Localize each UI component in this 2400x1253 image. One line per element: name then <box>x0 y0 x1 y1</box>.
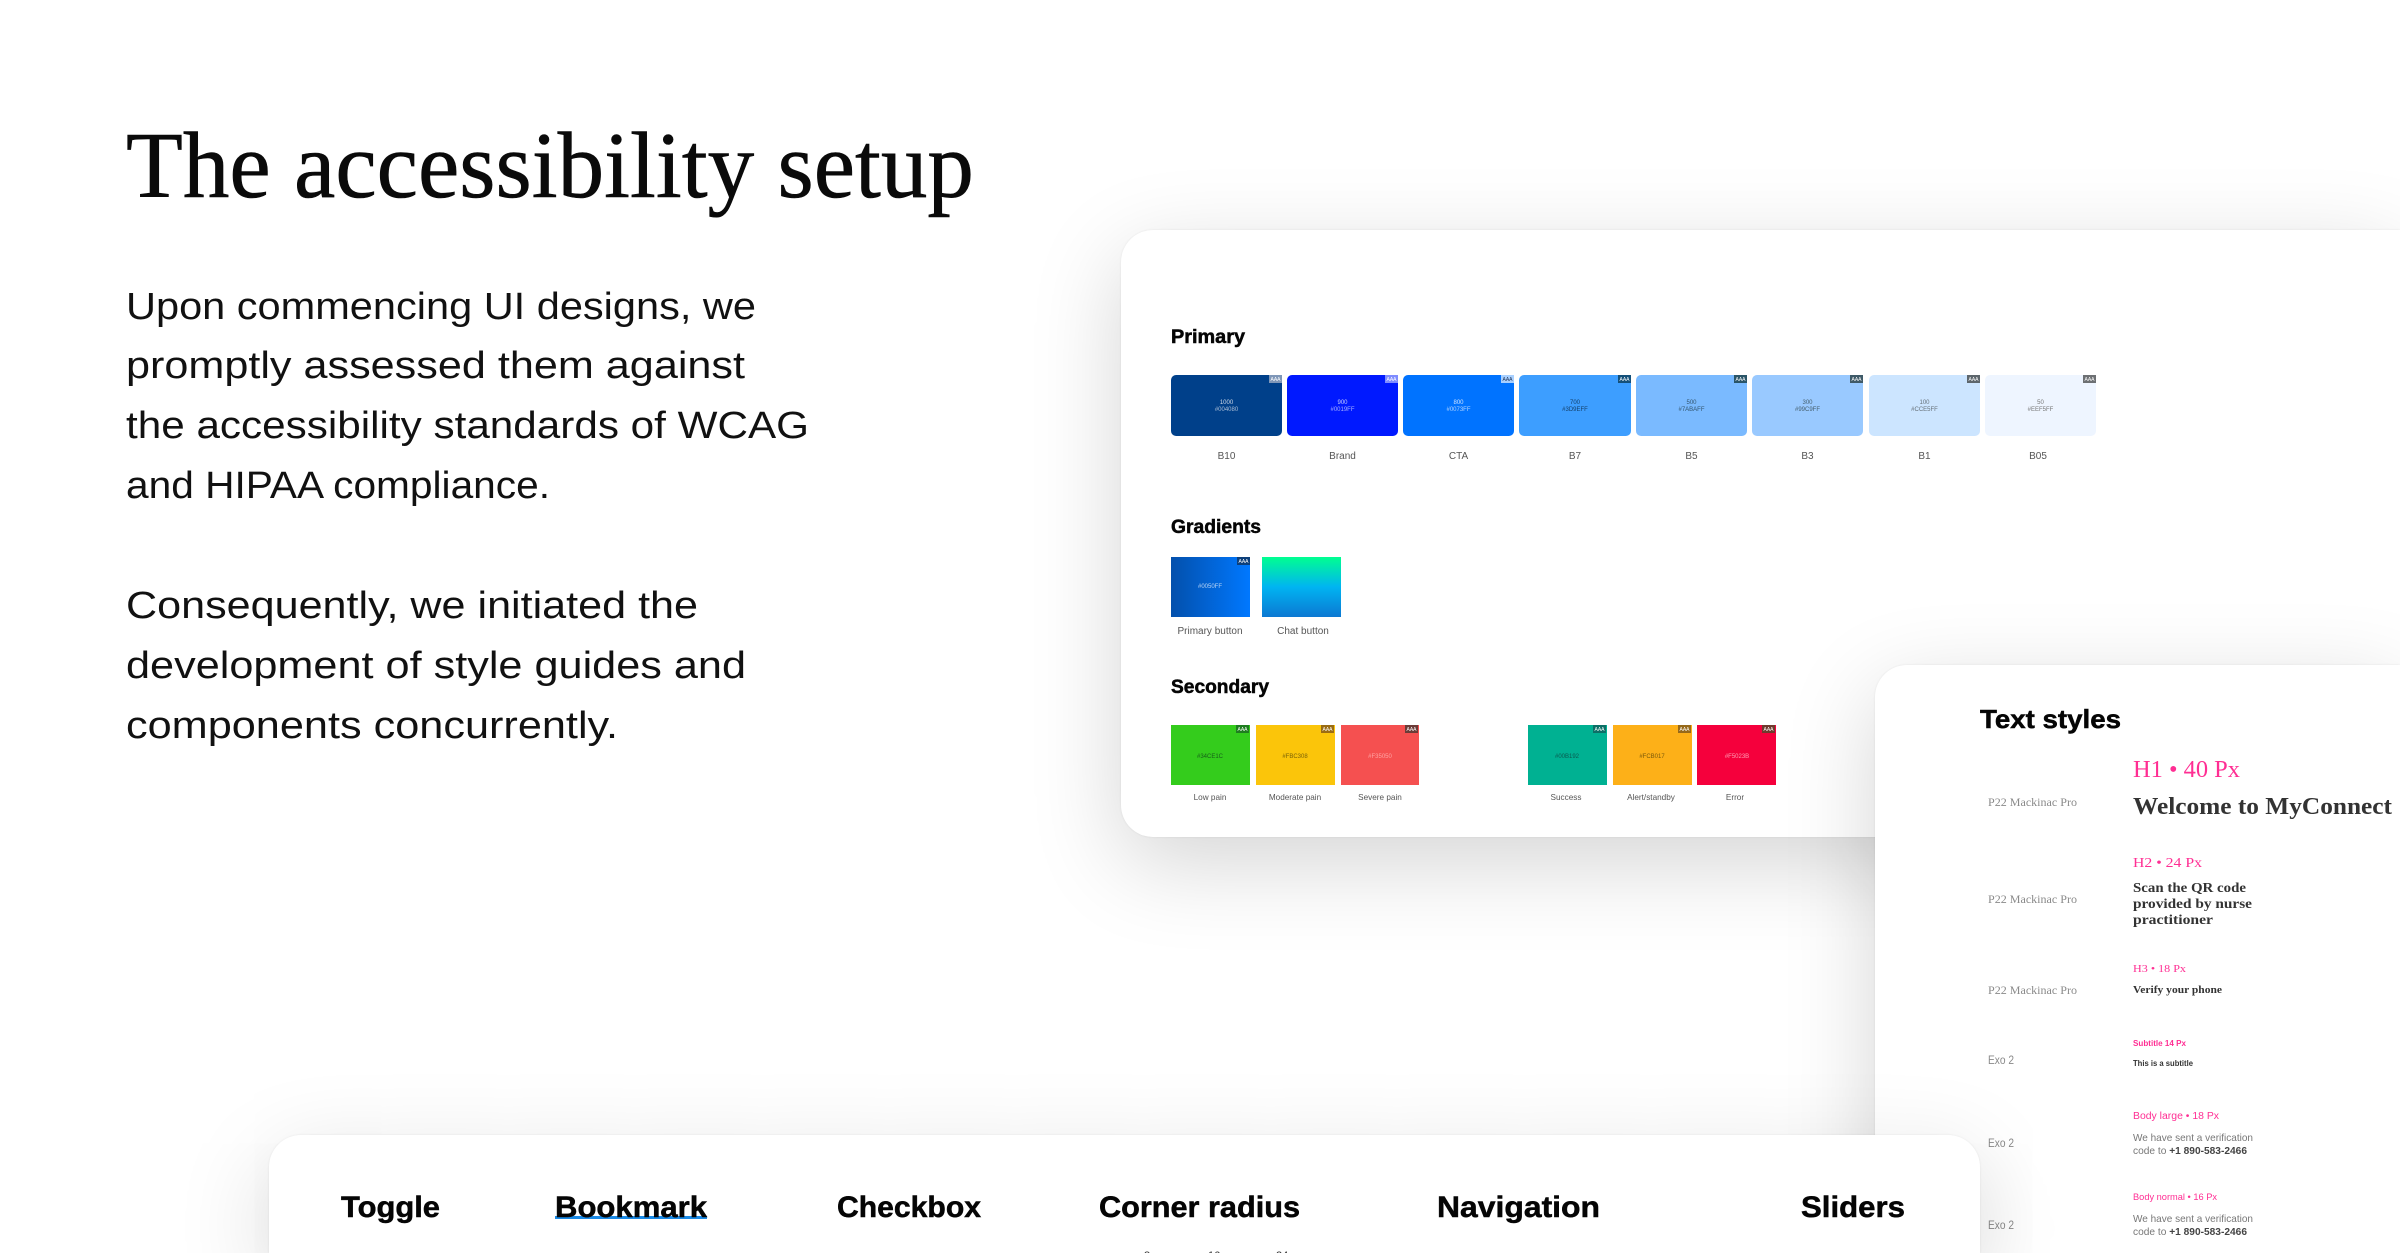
swatch: B3: #99C9FF <box>1795 407 1820 413</box>
row: body large: code to +1 890-583-2466 <box>2133 1145 2247 1157</box>
swatch: B3 <box>1752 375 1863 462</box>
row: subtitle: Subtitle 14 Px <box>2133 1039 2187 1048</box>
paragraph: consequently: development of style guides and <box>126 645 746 687</box>
swatch: primary button gradient: #0050FF <box>1198 584 1222 590</box>
swatch: B7: AAA <box>1619 377 1630 383</box>
swatch: B05: AAA <box>2084 377 2095 383</box>
swatch: low pain: #34CE1C <box>1197 754 1224 760</box>
swatch: success: #00B192 <box>1555 754 1580 760</box>
swatch: moderate pain: Moderate pain <box>1269 793 1322 802</box>
swatch: B5: B5 <box>1685 451 1698 462</box>
swatch: chat button gradient: Chat button <box>1277 626 1329 637</box>
swatch: B1 <box>1869 375 1980 462</box>
row: H3: H3 • 18 Px <box>2133 964 2186 975</box>
row: H2: H2 • 24 Px <box>2133 856 2202 871</box>
swatch: primary button gradient: AAA <box>1238 559 1249 565</box>
row: H3 <box>1988 964 2222 997</box>
row: H1 <box>1988 757 2392 820</box>
row: body normal: Exo 2 <box>1988 1218 2014 1232</box>
panel: text styles <box>1875 665 2400 1253</box>
swatch: B05: #EEF5FF <box>2028 407 2054 413</box>
swatch: B10: B10 <box>1218 451 1236 462</box>
intro text block <box>126 114 974 747</box>
swatch: Brand <box>1287 375 1398 462</box>
swatch: B05: B05 <box>2029 451 2047 462</box>
swatch: moderate pain: AAA <box>1322 727 1333 733</box>
swatch: Brand: #0019FF <box>1330 407 1355 413</box>
swatch: primary button gradient <box>1171 557 1250 637</box>
swatch: alert/standby: #FCB017 <box>1639 754 1665 760</box>
paragraph: upon commencing: Upon commencing UI designs, we <box>126 286 756 328</box>
row: subtitle: Exo 2 <box>1988 1053 2014 1067</box>
swatch: success: AAA <box>1594 727 1605 733</box>
swatch: CTA <box>1403 375 1514 462</box>
swatch: B3: B3 <box>1801 451 1814 462</box>
swatch: B10 <box>1171 375 1282 462</box>
paragraph: upon commencing <box>126 286 809 507</box>
swatch: chat button gradient <box>1262 557 1341 637</box>
row: subtitle: This is a subtitle <box>2133 1059 2194 1068</box>
swatch: alert/standby <box>1613 725 1692 802</box>
swatch: severe pain: #F35050 <box>1368 754 1393 760</box>
row: body normal: We have sent a verification <box>2133 1213 2253 1225</box>
paragraph: upon commencing: promptly assessed them against <box>126 345 745 387</box>
swatch: B5 <box>1636 375 1747 462</box>
swatch: success <box>1528 725 1607 802</box>
swatch: CTA: #0073FF <box>1446 407 1471 413</box>
swatch: Brand: AAA <box>1386 377 1397 383</box>
swatch: B05 <box>1985 375 2096 462</box>
swatch: CTA: CTA <box>1449 451 1468 462</box>
title: The accessibility setup <box>126 114 974 218</box>
panel: components <box>269 1135 1980 1253</box>
swatch: Brand: 900 <box>1337 400 1348 406</box>
swatch: severe pain: Severe pain <box>1358 793 1402 802</box>
heading: bookmark with underline: Bookmark <box>555 1191 707 1224</box>
swatch: B1: AAA <box>1968 377 1979 383</box>
swatch: low pain: AAA <box>1237 727 1248 733</box>
swatch: B1: B1 <box>1918 451 1931 462</box>
swatch: B3: AAA <box>1851 377 1862 383</box>
swatch: CTA: 800 <box>1453 400 1464 406</box>
swatch: B1: 100 <box>1919 400 1930 406</box>
row: H3: Verify your phone <box>2133 985 2222 996</box>
row: H2: P22 Mackinac Pro <box>1988 892 2077 906</box>
swatch: B7 <box>1519 375 1631 462</box>
swatch: B10: #004080 <box>1215 407 1239 413</box>
swatch: alert/standby: Alert/standby <box>1627 793 1676 802</box>
swatch: B10: AAA <box>1270 377 1281 383</box>
heading: navigation: Navigation <box>1437 1191 1600 1224</box>
swatch: severe pain: AAA <box>1406 727 1417 733</box>
swatch: severe pain <box>1341 725 1419 802</box>
row: H1: H1 • 40 Px <box>2133 757 2240 783</box>
swatch: B1: #CCE5FF <box>1911 407 1938 413</box>
row: body normal: code to +1 890-583-2466 <box>2133 1226 2247 1238</box>
swatch: CTA: AAA <box>1502 377 1513 383</box>
row: subtitle <box>1988 1039 2194 1068</box>
swatch: B05: 50 <box>2037 400 2044 406</box>
corner radius sub-labels, cut off <box>1144 1250 1300 1253</box>
swatch: moderate pain: #FBC308 <box>1282 754 1308 760</box>
paragraph: upon commencing: the accessibility standards of WCAG <box>126 405 809 447</box>
heading: checkbox: Checkbox <box>837 1191 981 1224</box>
heading: corner radius: Corner radius <box>1099 1191 1300 1224</box>
swatch: Brand: Brand <box>1329 451 1356 462</box>
row: body normal <box>1988 1192 2253 1238</box>
swatch: B5: #7ABAFF <box>1678 407 1705 413</box>
swatch: success: Success <box>1551 793 1581 802</box>
swatch: error <box>1697 725 1776 802</box>
swatch: B5: AAA <box>1735 377 1746 383</box>
swatch: error: AAA <box>1763 727 1774 733</box>
row: body normal: Body normal • 16 Px <box>2133 1192 2217 1203</box>
row: H1: Welcome to MyConnect <box>2133 794 2392 820</box>
swatch: error: Error <box>1726 793 1744 802</box>
swatch: B5: 500 <box>1686 400 1697 406</box>
swatch: low pain <box>1171 725 1250 802</box>
row: H3: P22 Mackinac Pro <box>1988 983 2077 997</box>
row: H2: practitioner <box>2133 913 2213 928</box>
heading: toggle: Toggle <box>341 1191 440 1224</box>
paragraph: consequently: Consequently, we initiated the <box>126 585 698 627</box>
heading: gradients: Gradients <box>1171 517 1261 538</box>
row: body large: Exo 2 <box>1988 1136 2014 1150</box>
paragraph: consequently <box>126 585 746 747</box>
swatch: B3: 300 <box>1802 400 1813 406</box>
swatch: low pain: Low pain <box>1194 793 1227 802</box>
swatch: B7: 700 <box>1570 400 1581 406</box>
row: body large <box>1988 1111 2253 1157</box>
row: H2 <box>1988 856 2252 928</box>
paragraph: consequently: components concurrently. <box>126 705 618 747</box>
swatch: primary button gradient: Primary button <box>1177 626 1243 637</box>
swatch: error: #F5023B <box>1725 754 1749 760</box>
heading: sliders: Sliders <box>1801 1191 1905 1224</box>
swatch: B7: #3D9EFF <box>1562 407 1588 413</box>
paragraph: upon commencing: and HIPAA compliance. <box>126 465 550 507</box>
row: body large: Body large • 18 Px <box>2133 1111 2219 1122</box>
heading: secondary: Secondary <box>1171 677 1269 698</box>
row: H1: P22 Mackinac Pro <box>1988 795 2077 809</box>
swatch: moderate pain <box>1256 725 1335 802</box>
swatch: B7: B7 <box>1569 451 1582 462</box>
heading: primary: Primary <box>1171 327 1245 348</box>
row: H2: Scan the QR code <box>2133 881 2246 896</box>
row: H2: provided by nurse <box>2133 897 2252 912</box>
row: body large: We have sent a verification <box>2133 1132 2253 1144</box>
swatch: alert/standby: AAA <box>1679 727 1690 733</box>
swatch: B10: 1000 <box>1220 400 1234 406</box>
panel: colour palette <box>1121 230 2400 837</box>
heading: text styles: Text styles <box>1980 704 2121 734</box>
